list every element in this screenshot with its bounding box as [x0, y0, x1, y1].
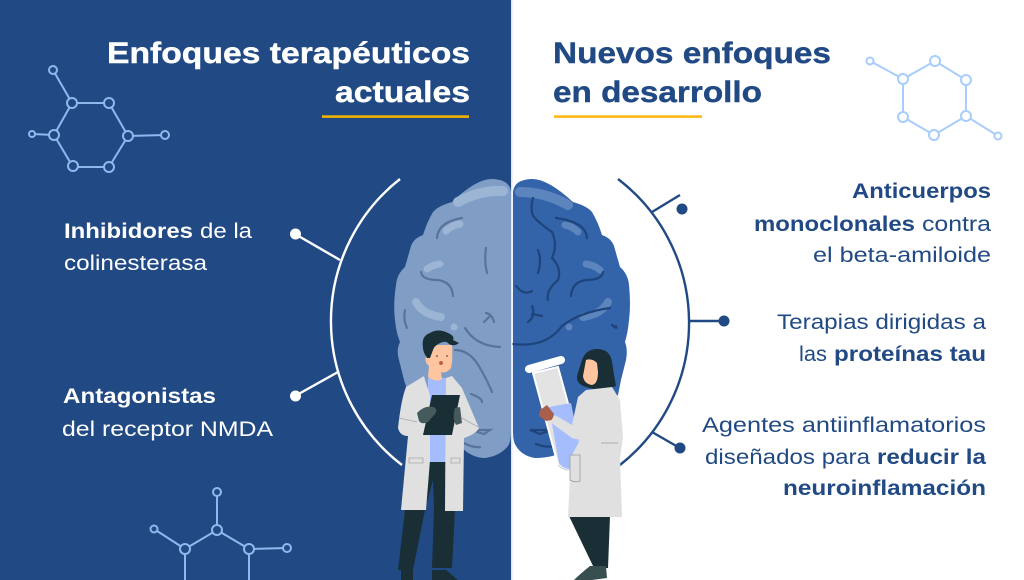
text: cholinesterase inhibitors: [64, 219, 252, 275]
woman hair: [577, 349, 616, 389]
icon: molecule top left: [29, 66, 169, 172]
text: NMDA antagonists: [62, 384, 273, 441]
heading: new approaches: en desarrollo: [553, 76, 762, 109]
woman pocket: [570, 455, 580, 482]
right arc and connectors: [618, 179, 730, 465]
text: tau therapies: [777, 311, 986, 366]
man shoes: [401, 570, 458, 580]
icon: molecule top right: [866, 56, 1002, 140]
heading underline right: [554, 115, 702, 118]
man gloves: [417, 407, 462, 425]
text: anti-inflammatory agents: neuroinflamación: [783, 476, 986, 500]
woman trousers: [569, 516, 610, 568]
illustration: male scientist: [398, 330, 479, 580]
woman shoes: [574, 566, 607, 580]
text: cholinesterase inhibitors: Inhibidores: [64, 219, 193, 243]
man lab coat: [398, 376, 479, 511]
text: monoclonal antibodies: contra: [922, 213, 991, 236]
text: anti-inflammatory agents: Agentes antiinflamatorios: [702, 414, 986, 437]
text: monoclonal antibodies: [754, 179, 991, 267]
text: monoclonal antibodies: Anticuerpos: [852, 179, 991, 203]
man neck and face: [425, 345, 452, 381]
text: cholinesterase inhibitors: colinesterasa: [64, 252, 207, 275]
text: anti-inflammatory agents: diseñados para: [705, 446, 870, 469]
panel: right background: [512, 0, 1024, 580]
man tablet: [423, 395, 460, 435]
text: anti-inflammatory agents: [702, 414, 987, 500]
heading: new approaches: Nuevos enfoques: [553, 37, 831, 70]
illustration: female scientist: [529, 349, 623, 580]
man trousers: [398, 460, 455, 570]
text: monoclonal antibodies: el beta-amiloide: [813, 244, 991, 267]
man hair: [423, 330, 459, 358]
left arc and connectors: [290, 179, 402, 465]
heading underline left: [322, 115, 469, 118]
text: cholinesterase inhibitors: de la: [200, 220, 252, 243]
text: monoclonal antibodies: monoclonales: [754, 212, 915, 236]
panel: left background: [0, 0, 512, 580]
illustration: right brain hemisphere: [513, 179, 630, 458]
illustration: left brain hemisphere: [394, 179, 511, 458]
text: anti-inflammatory agents: reducir la: [877, 445, 987, 469]
woman lab coat: [550, 387, 623, 517]
heading: new approaches: [553, 37, 831, 109]
heading: current approaches: actuales: [335, 76, 470, 109]
text: tau therapies: Terapias dirigidas a: [777, 311, 986, 334]
woman face: [583, 359, 598, 385]
text: tau therapies: proteínas tau: [834, 342, 986, 366]
woman hand: [539, 405, 554, 421]
test tube: [529, 360, 580, 470]
text: NMDA antagonists: Antagonistas: [63, 384, 216, 408]
icon: molecule bottom left: [150, 488, 291, 580]
heading: current approaches: Enfoques terapéuticos: [107, 37, 470, 70]
man shirt: [428, 378, 446, 462]
heading: current approaches: [107, 37, 470, 109]
text: tau therapies: las: [799, 343, 827, 366]
text: NMDA antagonists: del receptor NMDA: [62, 418, 273, 441]
mid divider highlight: [511, 0, 512, 580]
